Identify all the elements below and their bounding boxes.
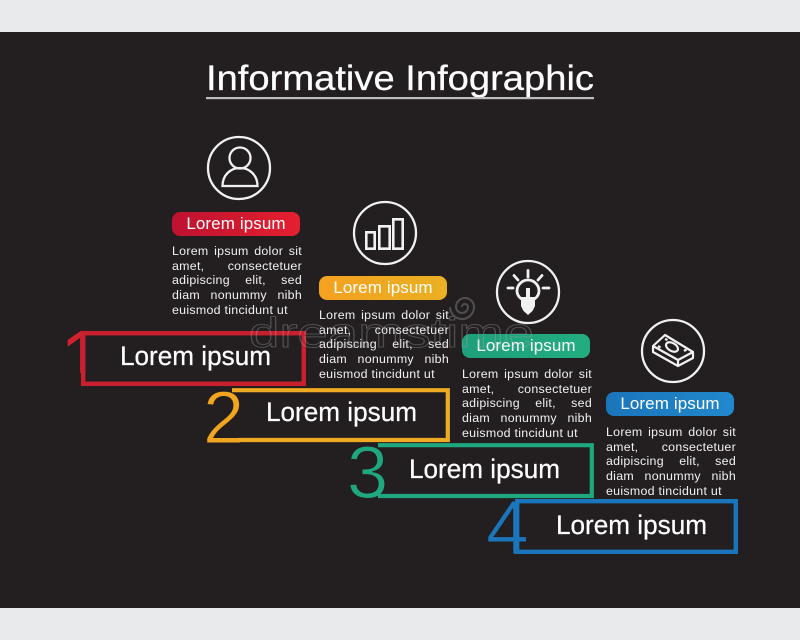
- body text: amet, consectetuer: [462, 382, 592, 396]
- body text: diam nonummy nibh: [606, 469, 736, 483]
- body text: Lorem ipsum dolor sit: [462, 367, 592, 381]
- body text: amet, consectetuer: [172, 259, 302, 273]
- watermark: [249, 297, 534, 352]
- pill label: orange: [319, 276, 447, 300]
- pill label: red: [172, 212, 300, 236]
- stair 3: green numbered bar: [347, 440, 594, 502]
- pill label: blue: [606, 392, 734, 416]
- body text: diam nonummy nibh: [319, 352, 449, 366]
- body text: euismod tincidunt ut: [606, 484, 722, 498]
- column 4: money: [606, 318, 736, 498]
- body text: diam nonummy nibh: [172, 288, 302, 302]
- body text: adipiscing elit, sed: [606, 454, 736, 468]
- stair 1: red numbered bar: [68, 330, 306, 386]
- stair 4: blue numbered bar: Lorem ipsum: [556, 510, 707, 540]
- pill label: green: Lorem ipsum: [476, 336, 576, 355]
- icon: person: [206, 136, 272, 200]
- body text: euismod tincidunt ut: [172, 303, 288, 317]
- pill label: red: Lorem ipsum: [186, 214, 286, 233]
- column 3: light bulb: [462, 260, 592, 440]
- body text: Lorem ipsum dolor sit: [172, 244, 302, 258]
- body text: adipiscing elit, sed: [462, 396, 592, 410]
- column 1: person: [172, 136, 302, 317]
- body text: amet, consectetuer: [606, 440, 736, 454]
- body text: [172, 244, 302, 317]
- body text: Lorem ipsum dolor sit: [319, 308, 449, 322]
- pill label: blue: Lorem ipsum: [620, 394, 720, 413]
- stair 1: red numbered bar: Lorem ipsum: [120, 341, 271, 371]
- body text: euismod tincidunt ut: [319, 367, 435, 381]
- icon: bar chart: [352, 200, 418, 266]
- column 2: bar chart: [319, 200, 449, 381]
- body text: amet, consectetuer: [319, 323, 449, 337]
- icon: banknote stack: [640, 318, 706, 384]
- icon: light bulb: [496, 260, 560, 324]
- body text: diam nonummy nibh: [462, 411, 592, 425]
- body text: [462, 367, 592, 440]
- pill label: green: [462, 334, 590, 358]
- body text: adipiscing elit, sed: [172, 273, 302, 287]
- body text: Lorem ipsum dolor sit: [606, 425, 736, 439]
- title: Informative Infographic: [206, 59, 594, 98]
- stair 2: orange numbered bar: Lorem ipsum: [266, 397, 417, 427]
- pill label: orange: Lorem ipsum: [333, 278, 433, 297]
- body text: adipiscing elit, sed: [319, 337, 449, 351]
- stair 2: orange numbered bar: [203, 384, 450, 446]
- stair 4: blue numbered bar: [486, 495, 738, 558]
- body text: euismod tincidunt ut: [462, 426, 578, 440]
- stair 3: green numbered bar: Lorem ipsum: [409, 454, 560, 484]
- body text: [319, 308, 449, 381]
- body text: [606, 425, 736, 498]
